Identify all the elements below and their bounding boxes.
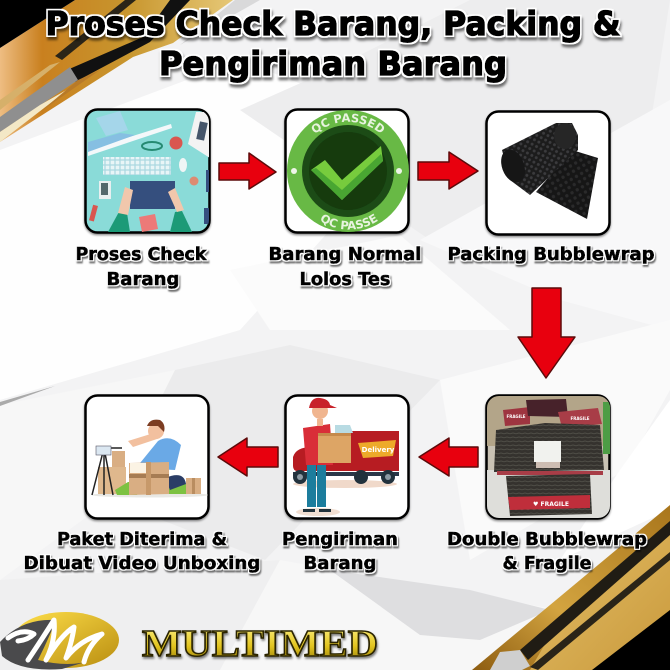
- label: paket diterima and video unboxing: Dibuat Video Unboxing: [24, 554, 260, 574]
- card: double bubblewrap and fragile photo: FRAGILE: [571, 416, 590, 421]
- card: double bubblewrap and fragile photo: ♥ FRAGILE: [533, 501, 569, 508]
- label: barang normal lolos tes: Lolos Tes: [300, 270, 390, 290]
- title: Proses Check Barang, Packing &: [46, 5, 620, 43]
- decoration: gold and black corner top-left: [0, 0, 233, 142]
- label: barang normal lolos tes: Barang Normal: [268, 245, 422, 265]
- label: double bubblewrap and fragile: Double Bubblewrap: [447, 530, 647, 550]
- card: bubblewrap roll: [486, 112, 610, 234]
- label: paket diterima and video unboxing: Paket Diterima &: [57, 530, 227, 550]
- arrow: delivery to unboxing: [218, 438, 278, 476]
- arrow: double bubblewrap to delivery: [419, 438, 478, 476]
- label: pengiriman barang: Barang: [304, 554, 376, 574]
- card: delivery courier and truck: Delivery: [362, 446, 395, 454]
- label: proses check barang: Barang: [106, 270, 180, 290]
- logo: multimed wordmark: MULTIMED: [142, 623, 378, 665]
- decoration: gold and black corner bottom-right: [472, 505, 670, 670]
- label: double bubblewrap and fragile: [447, 530, 647, 574]
- title: Pengiriman Barang: [159, 45, 507, 83]
- card: QC passed badge: QC PASSED: [312, 113, 384, 132]
- label: packing bubblewrap: Packing Bubblewrap: [448, 245, 654, 265]
- arrow: check to QC: [219, 153, 276, 189]
- label: pengiriman barang: [282, 530, 398, 574]
- arrow: packing down to double bubblewrap: [518, 288, 575, 378]
- label: pengiriman barang: Pengiriman: [282, 530, 398, 550]
- card: unboxing video: [86, 396, 208, 518]
- label: paket diterima and video unboxing: [24, 530, 260, 574]
- label: barang normal lolos tes: [268, 245, 422, 290]
- title: [46, 5, 620, 83]
- card: proses check barang: [86, 110, 210, 232]
- card: QC passed badge: [282, 108, 412, 237]
- arrow: QC to packing: [418, 152, 478, 189]
- label: proses check barang: [76, 245, 207, 290]
- card: double bubblewrap and fragile photo: [486, 396, 611, 520]
- logo: multimed emblem: [0, 612, 119, 669]
- card: double bubblewrap and fragile photo: FRAGILE: [507, 414, 526, 419]
- card: delivery courier and truck: [286, 396, 408, 518]
- label: double bubblewrap and fragile: & Fragile: [502, 554, 592, 574]
- card: QC passed badge: QC PASSE: [321, 214, 378, 230]
- label: proses check barang: Proses Check: [76, 245, 207, 265]
